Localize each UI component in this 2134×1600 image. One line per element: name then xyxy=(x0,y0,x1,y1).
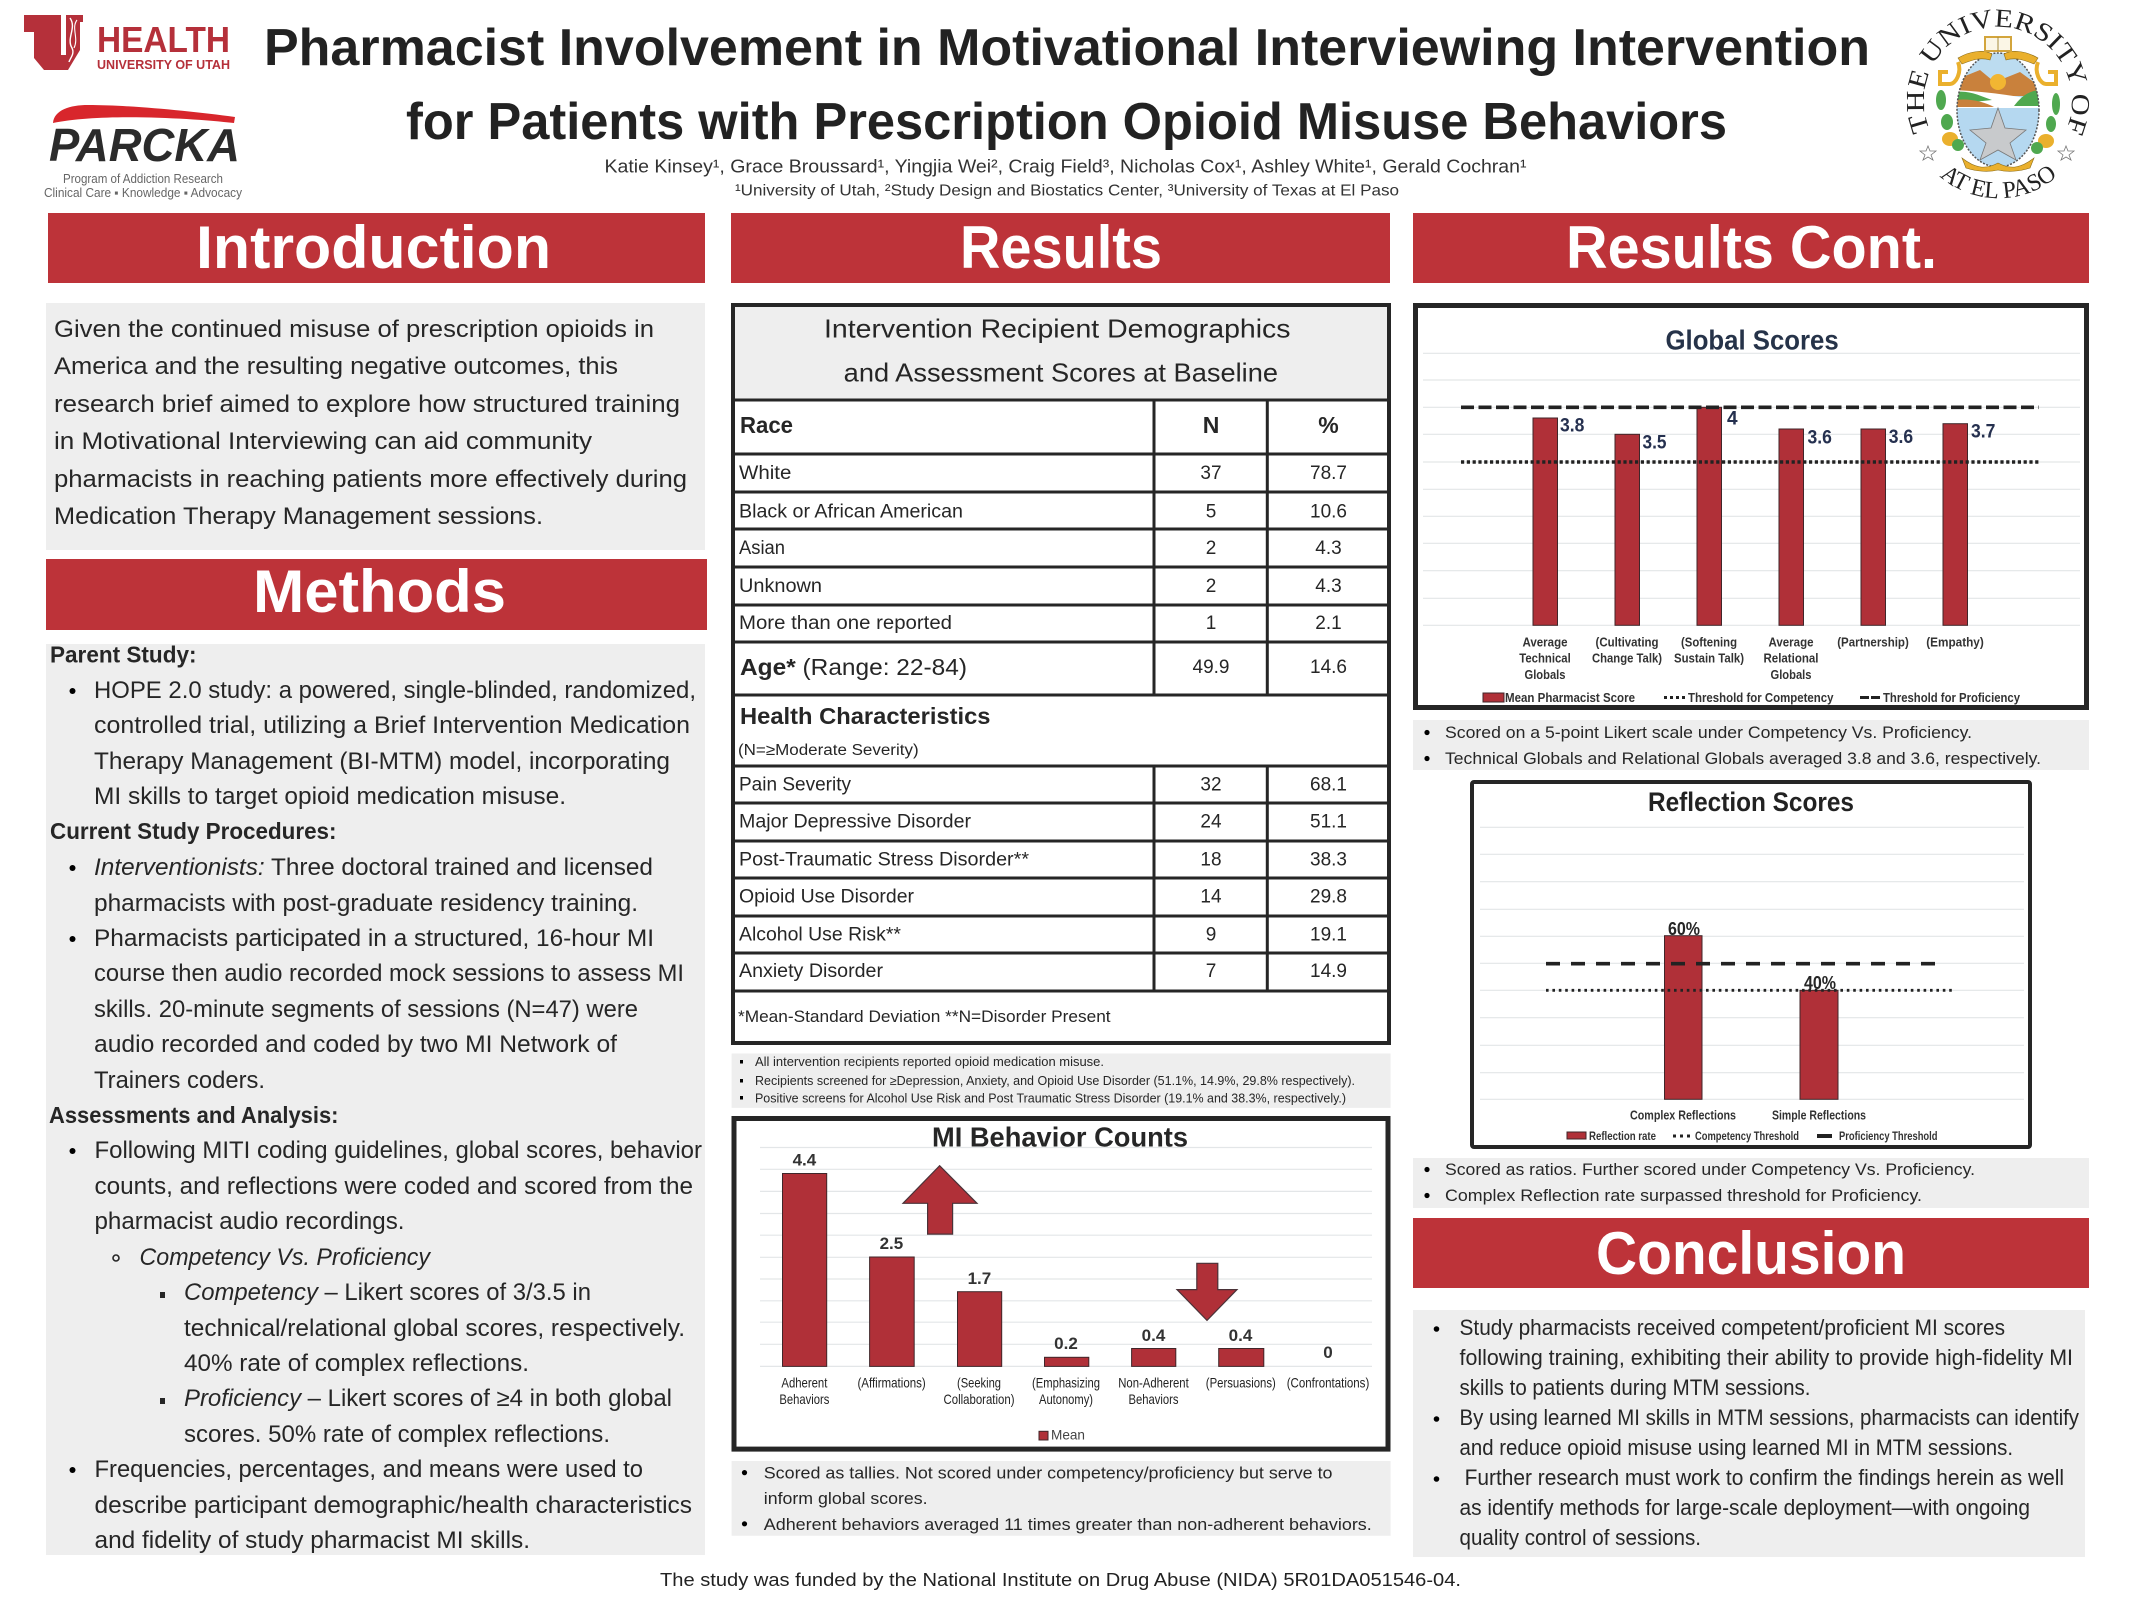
value labels: 1.7 xyxy=(968,1269,991,1288)
heading: Results: Results xyxy=(960,214,1162,281)
health characteristics rows xyxy=(738,703,1347,982)
logo: PARCKA: Program of Addiction Research xyxy=(63,172,223,186)
panel: demographics notes: All intervention recipients reported opioid medication misuse. xyxy=(755,1055,1104,1069)
logo: PARCKA xyxy=(44,105,243,200)
health characteristics rows: 29.8 xyxy=(1310,887,1347,908)
value labels: 3.6 xyxy=(1808,428,1832,448)
category labels: Autonomy) xyxy=(1039,1391,1093,1407)
table footnote: *Mean-Standard Deviation **N=Disorder Present xyxy=(738,1007,1111,1026)
race rows: 1 xyxy=(1206,613,1216,634)
value labels: 3.7 xyxy=(1971,422,1995,442)
legend: Threshold for Competency xyxy=(1688,690,1834,705)
parent study: HOPE 2.0 study: a powered, single-blinded, randomized, xyxy=(94,677,696,704)
panel: introduction text: research brief aimed to explore how structured training xyxy=(54,391,680,418)
legend: Mean xyxy=(1051,1426,1085,1442)
value labels: 4 xyxy=(1727,408,1738,430)
parent study: controlled trial, utilizing a Brief Intervention Medication xyxy=(94,712,690,739)
heading: Introduction xyxy=(48,213,705,283)
health characteristics rows: 68.1 xyxy=(1310,775,1347,796)
current study procedures: Current Study Procedures: xyxy=(50,818,336,844)
health characteristics rows: Major Depressive Disorder xyxy=(739,812,972,833)
assessments and analysis: 40% rate of complex reflections. xyxy=(184,1350,529,1377)
race rows: N xyxy=(1203,412,1219,438)
race rows: 2.1 xyxy=(1315,613,1342,634)
panel: conclusion text: and reduce opioid misuse using learned MI in MTM sessions. xyxy=(1460,1435,2013,1460)
assessments and analysis: pharmacist audio recordings. xyxy=(94,1208,404,1235)
panel: demographics notes: Recipients screened for ≥Depression, Anxiety, and Opioid Use Disorder (51.1%, 14.9%, 29.8% respectively). xyxy=(755,1074,1355,1088)
category labels: Behaviors xyxy=(1128,1391,1178,1407)
race rows: More than one reported xyxy=(739,613,952,634)
panel: behavior counts notes: Adherent behaviors averaged 11 times greater than non-adherent behaviors. xyxy=(764,1515,1372,1534)
legend: Reflection rate xyxy=(1589,1131,1656,1143)
threshold: proficiency xyxy=(1546,962,1943,966)
category labels: Average xyxy=(1768,635,1814,650)
bars xyxy=(1533,407,1968,625)
arrow: down xyxy=(1177,1263,1237,1320)
race rows: % xyxy=(1318,412,1339,438)
health characteristics rows: Health Characteristics xyxy=(740,703,990,729)
race rows: 4.3 xyxy=(1315,576,1342,597)
parent study xyxy=(50,642,696,810)
heading: Methods xyxy=(46,558,707,630)
chart title: Reflection Scores xyxy=(1648,787,1854,817)
category labels: Globals xyxy=(1524,667,1566,682)
category labels: Non-Adherent xyxy=(1118,1374,1189,1390)
assessments and analysis: describe participant demographic/health characteristics xyxy=(94,1492,692,1519)
health characteristics rows: 38.3 xyxy=(1310,850,1347,871)
health characteristics rows: Post-Traumatic Stress Disorder** xyxy=(739,850,1030,871)
health characteristics rows: 32 xyxy=(1200,775,1222,796)
category labels: (Persuasions) xyxy=(1206,1374,1276,1390)
legend: Threshold for Proficiency xyxy=(1883,690,2021,705)
table: demographics and assessment scores xyxy=(733,305,1389,1043)
panel: introduction text: pharmacists in reaching patients more effectively during xyxy=(54,466,687,493)
logo: PARCKA: Clinical Care ▪ Knowledge ▪ Advocacy xyxy=(44,186,243,200)
value labels: 0 xyxy=(1323,1343,1333,1362)
category labels: (Emphasizing xyxy=(1032,1374,1100,1390)
category labels: (Seeking xyxy=(957,1374,1001,1390)
health characteristics rows: 14.9 xyxy=(1310,961,1347,982)
heading: Methods: Methods xyxy=(253,558,506,625)
panel: conclusion text: By using learned MI skills in MTM sessions, pharmacists can identify xyxy=(1460,1405,2079,1430)
panel: reflection scores notes: Complex Reflection rate surpassed threshold for Proficiency. xyxy=(1445,1186,1922,1205)
panel: conclusion text xyxy=(1413,1310,2085,1557)
health characteristics rows: Pain Severity xyxy=(739,775,851,796)
race rows: Race xyxy=(740,412,793,438)
logo: University of Utah Health xyxy=(24,15,230,72)
threshold: competency xyxy=(1461,460,2039,464)
category labels: Sustain Talk) xyxy=(1674,651,1744,666)
panel: conclusion text: quality control of sessions. xyxy=(1460,1525,1701,1550)
health characteristics rows: 14 xyxy=(1200,887,1222,908)
category labels: Change Talk) xyxy=(1592,651,1662,666)
logo: University of Texas at El Paso seal: AT EL PASO xyxy=(1940,166,2054,198)
category labels: Average xyxy=(1522,635,1568,650)
category labels xyxy=(1630,1108,1866,1122)
bars xyxy=(782,1174,1264,1366)
threshold: competency xyxy=(1546,989,1952,992)
threshold: proficiency xyxy=(1461,405,2039,409)
value labels: 60% xyxy=(1668,919,1700,939)
race rows xyxy=(739,412,1347,634)
current study procedures: skills. 20-minute segments of sessions (N=47) were xyxy=(94,996,638,1023)
health characteristics rows: 24 xyxy=(1200,812,1222,833)
panel: conclusion text: following training, exhibiting their ability to provide high-fidelity MI xyxy=(1460,1345,2073,1370)
race rows: 10.6 xyxy=(1310,501,1347,522)
logo: University of Utah Health: HEALTH xyxy=(97,19,230,60)
authors and affiliations: ¹University of Utah, ²Study Design and Biostatics Center, ³University of Texas at El Paso xyxy=(735,183,1399,200)
assessments and analysis: Frequencies, percentages, and means were used to xyxy=(94,1456,643,1483)
race rows: Asian xyxy=(739,538,785,559)
assessments and analysis: counts, and reflections were coded and scored from the xyxy=(94,1173,693,1200)
panel: global scores notes xyxy=(1413,720,2089,770)
assessments and analysis xyxy=(49,1102,702,1554)
assessments and analysis: Competency Vs. Proficiency xyxy=(140,1244,432,1271)
category labels: Globals xyxy=(1770,667,1812,682)
category labels: Complex Reflections xyxy=(1630,1108,1736,1122)
chart title: Global Scores xyxy=(1666,324,1839,355)
category labels: (Affirmations) xyxy=(857,1374,926,1390)
assessments and analysis: Competency – Likert scores of 3/3.5 in xyxy=(184,1279,591,1306)
current study procedures xyxy=(50,818,684,1094)
current study procedures: pharmacists with post-graduate residency training. xyxy=(94,890,638,917)
health characteristics rows: 19.1 xyxy=(1310,925,1347,946)
panel: behavior counts notes: Scored as tallies. Not scored under competency/proficiency but serve to xyxy=(764,1464,1332,1483)
panel: introduction text: Given the continued misuse of prescription opioids in xyxy=(54,316,654,343)
chart: Reflection Scores xyxy=(1472,782,2030,1147)
funding footer: The study was funded by the National Institute on Drug Abuse (NIDA) 5R01DA051546-04. xyxy=(660,1569,1461,1590)
value labels xyxy=(1668,919,1836,993)
race rows: White xyxy=(739,463,791,484)
logo: University of Texas at El Paso seal xyxy=(1906,10,2090,198)
race rows: 78.7 xyxy=(1310,463,1347,484)
arrow: up xyxy=(903,1166,977,1234)
value labels: 2.5 xyxy=(880,1234,903,1253)
panel: introduction text: in Motivational Interviewing can aid community xyxy=(54,428,592,455)
health characteristics rows: Anxiety Disorder xyxy=(739,961,884,982)
age row xyxy=(740,654,1347,680)
panel: global scores notes: Technical Globals and Relational Globals averaged 3.8 and 3.6, respectively. xyxy=(1445,749,2041,768)
current study procedures: Trainers coders. xyxy=(94,1067,265,1094)
age row: Age* (Range: 22-84) xyxy=(740,654,967,680)
chart: Global Scores xyxy=(1416,306,2086,708)
panel: global scores notes: Scored on a 5-point Likert scale under Competency Vs. Proficiency. xyxy=(1445,723,1972,742)
category labels: (Softening xyxy=(1681,635,1737,650)
health characteristics rows: 7 xyxy=(1206,961,1216,982)
panel: demographics notes: Positive screens for Alcohol Use Risk and Post Traumatic Stress Disorder (19.1% and 38.3%, respectively.) xyxy=(755,1092,1346,1106)
race rows: 37 xyxy=(1200,463,1222,484)
legend: Proficiency Threshold xyxy=(1839,1131,1938,1143)
current study procedures: audio recorded and coded by two MI Network of xyxy=(94,1031,617,1058)
heading: Results Cont. xyxy=(1413,213,2089,283)
category labels: Behaviors xyxy=(779,1391,829,1407)
table title: and Assessment Scores at Baseline xyxy=(844,358,1278,388)
race rows: Black or African American xyxy=(739,501,963,522)
value labels xyxy=(793,1151,1333,1362)
category labels: Technical xyxy=(1519,651,1571,666)
chart title: MI Behavior Counts xyxy=(932,1122,1188,1152)
title: Pharmacist Involvement in Motivational Interviewing Intervention xyxy=(264,19,1870,77)
value labels: 40% xyxy=(1804,973,1836,993)
value labels: 0.4 xyxy=(1229,1326,1253,1345)
panel: conclusion text: Study pharmacists received competent/proficient MI scores xyxy=(1460,1315,2005,1340)
panel: introduction text xyxy=(46,303,705,550)
health characteristics rows: 51.1 xyxy=(1310,812,1347,833)
panel: conclusion text: as identify methods for large-scale deployment—with ongoing xyxy=(1460,1495,2030,1520)
assessments and analysis: Assessments and Analysis: xyxy=(49,1102,338,1128)
value labels: 0.2 xyxy=(1054,1334,1078,1353)
heading: Results Cont.: Results Cont. xyxy=(1566,214,1937,281)
assessments and analysis: scores. 50% rate of complex reflections. xyxy=(184,1421,610,1448)
race rows: 2 xyxy=(1206,576,1216,597)
panel: conclusion text: skills to patients during MTM sessions. xyxy=(1460,1375,1810,1400)
category labels: (Partnership) xyxy=(1837,635,1909,650)
race rows: 2 xyxy=(1206,538,1216,559)
assessments and analysis: and fidelity of study pharmacist MI skills. xyxy=(94,1527,530,1554)
race rows: 4.3 xyxy=(1315,538,1342,559)
health characteristics rows: 9 xyxy=(1206,925,1216,946)
logo: University of Utah Health: UNIVERSITY OF UTAH xyxy=(97,58,230,72)
value labels: 3.5 xyxy=(1642,432,1667,454)
panel: behavior counts notes: inform global scores. xyxy=(764,1489,928,1508)
race rows: Unknown xyxy=(739,576,822,597)
health characteristics rows: Alcohol Use Risk** xyxy=(739,925,902,946)
parent study: Therapy Management (BI-MTM) model, incorporating xyxy=(94,748,670,775)
category labels: Relational xyxy=(1764,651,1818,666)
value labels: 3.8 xyxy=(1560,416,1584,436)
category labels: Simple Reflections xyxy=(1772,1108,1866,1122)
authors and affiliations: Katie Kinsey¹, Grace Broussard¹, Yingjia Wei², Craig Field³, Nicholas Cox¹, Ashley White¹, Gerald Cochran¹ xyxy=(604,156,1526,177)
title: for Patients with Prescription Opioid Misuse Behaviors xyxy=(406,93,1727,151)
legend xyxy=(1567,1131,1938,1143)
value labels: 3.6 xyxy=(1889,427,1913,448)
category labels xyxy=(779,1374,1369,1407)
heading: Conclusion xyxy=(1413,1218,2089,1288)
race rows: 5 xyxy=(1206,501,1216,522)
legend: Mean Pharmacist Score xyxy=(1505,690,1635,705)
assessments and analysis: Proficiency – Likert scores of ≥4 in both global xyxy=(184,1385,672,1412)
current study procedures: Pharmacists participated in a structured, 16-hour MI xyxy=(94,925,654,952)
authors and affiliations xyxy=(604,156,1526,200)
legend xyxy=(1483,690,2021,705)
heading: Conclusion: Conclusion xyxy=(1596,1220,1906,1287)
panel: reflection scores notes xyxy=(1413,1158,2089,1208)
current study procedures: Interventionists: Three doctoral trained and licensed xyxy=(94,854,653,881)
legend: Competency Threshold xyxy=(1695,1131,1799,1143)
panel: behavior counts notes xyxy=(732,1461,1391,1536)
parent study: Parent Study: xyxy=(50,642,196,668)
category labels xyxy=(1519,635,1984,682)
heading: Introduction: Introduction xyxy=(196,214,551,281)
value labels: 4.4 xyxy=(793,1151,817,1170)
parent study: MI skills to target opioid medication misuse. xyxy=(94,783,566,810)
table title xyxy=(824,314,1290,388)
heading: Results xyxy=(731,213,1390,283)
logo: PARCKA: PARCKA xyxy=(49,119,240,171)
value labels: 0.4 xyxy=(1142,1326,1166,1345)
health characteristics rows: Opioid Use Disorder xyxy=(739,887,915,908)
panel: demographics notes xyxy=(732,1054,1391,1108)
category labels: (Empathy) xyxy=(1926,635,1984,650)
assessments and analysis: Following MITI coding guidelines, global scores, behavior xyxy=(94,1137,702,1164)
health characteristics rows: 18 xyxy=(1200,850,1222,871)
age row: 49.9 xyxy=(1193,657,1229,678)
current study procedures: course then audio recorded mock sessions to assess MI xyxy=(94,960,684,987)
title xyxy=(264,19,1870,151)
panel: conclusion text: Further research must work to confirm the findings herein as well xyxy=(1465,1465,2064,1490)
panel: introduction text: America and the resulting negative outcomes, this xyxy=(54,353,618,380)
category labels: Collaboration) xyxy=(944,1391,1014,1407)
health characteristics rows: (N=≥Moderate Severity) xyxy=(738,742,919,759)
age row: 14.6 xyxy=(1310,657,1347,678)
bars xyxy=(1664,936,1838,1099)
table title: Intervention Recipient Demographics xyxy=(824,314,1290,344)
panel: methods text xyxy=(46,642,705,1555)
chart: MI Behavior Counts xyxy=(734,1118,1388,1449)
category labels: (Cultivating xyxy=(1596,635,1659,650)
category labels: Adherent xyxy=(781,1374,827,1390)
value labels xyxy=(1560,408,1995,454)
assessments and analysis: technical/relational global scores, respectively. xyxy=(184,1315,685,1342)
panel: introduction text: Medication Therapy Management sessions. xyxy=(54,503,543,530)
panel: reflection scores notes: Scored as ratios. Further scored under Competency Vs. Proficiency. xyxy=(1445,1160,1975,1179)
category labels: (Confrontations) xyxy=(1287,1374,1369,1390)
